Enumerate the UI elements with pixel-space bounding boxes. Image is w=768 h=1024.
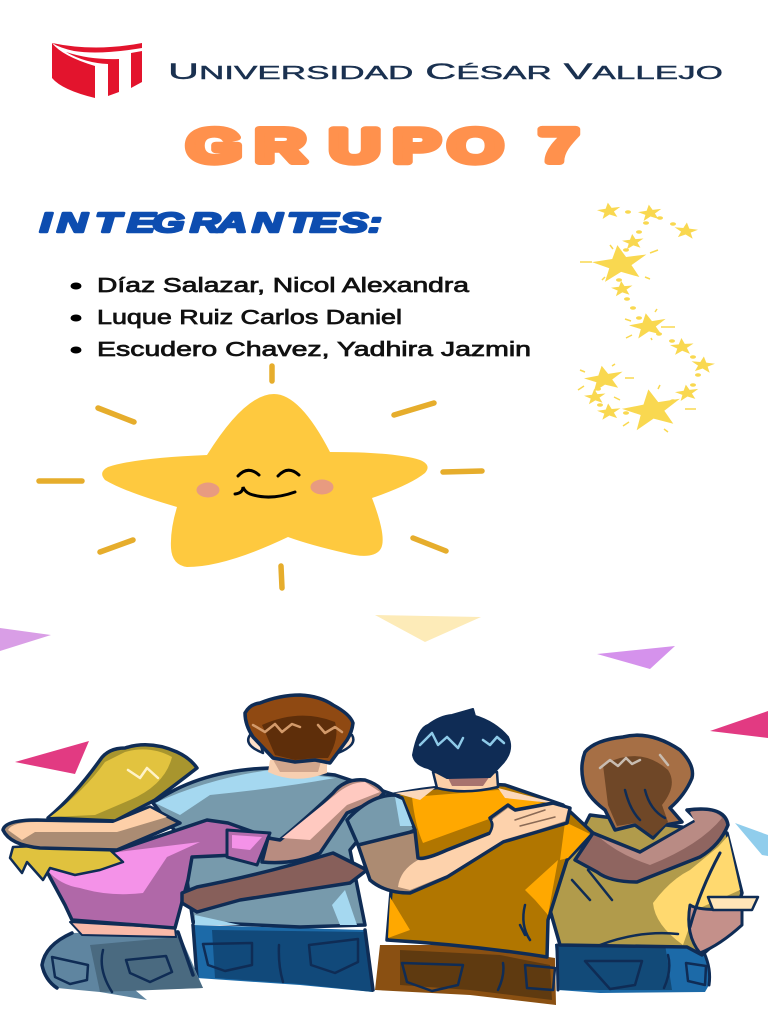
big smiling star bbox=[39, 366, 482, 588]
hugging arms in the centre bbox=[182, 780, 570, 912]
illustration: four friends hugging bbox=[3, 695, 758, 1005]
star body bbox=[102, 394, 428, 567]
member 2: Luque Ruiz Carlos Daniel bbox=[97, 307, 402, 329]
member 1 bbox=[70, 275, 470, 297]
arm: grey sleeve bbox=[347, 795, 415, 845]
logo: Universidad César Vallejo bbox=[52, 43, 723, 98]
person 1: boy with brown hair bbox=[153, 695, 395, 992]
heading: integrantes: INTEGRANTES: bbox=[40, 207, 382, 238]
logo wordmark: U NIVERSIDAD C ÉSAR V ALLEJO bbox=[168, 59, 723, 84]
arm: girl's arm over shoulder bbox=[262, 780, 384, 863]
bunting triangles bbox=[0, 615, 768, 856]
star cheeks bbox=[196, 480, 334, 498]
person 4: brown-haired friend bbox=[550, 735, 758, 993]
arm: lower dark arm bbox=[182, 853, 367, 912]
star smile face bbox=[235, 470, 299, 497]
member 2 bbox=[70, 307, 402, 329]
title: GRUPO 7 bbox=[187, 120, 578, 172]
person 3: blonde girl in pink bbox=[3, 745, 270, 1000]
person 2: navy-haired boy in orange bbox=[375, 709, 593, 1005]
icon: red shield book bbox=[52, 43, 142, 98]
member 1: Díaz Salazar, Nicol Alexandra bbox=[97, 275, 470, 297]
star rays bbox=[39, 366, 482, 588]
arm: boy's arm on friend's shoulder bbox=[358, 803, 570, 893]
member 3: Escudero Chavez, Yadhira Jazmin bbox=[97, 339, 531, 361]
decorative star trail bbox=[578, 201, 716, 432]
list of members bbox=[70, 275, 531, 361]
member 3 bbox=[70, 339, 531, 361]
